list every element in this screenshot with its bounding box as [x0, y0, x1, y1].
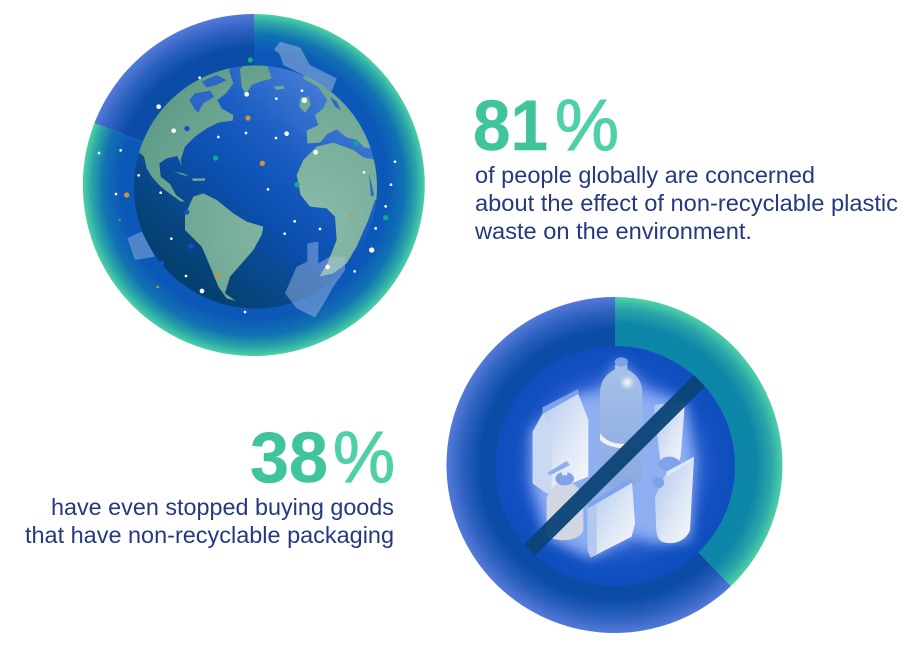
plastic bottle debris	[274, 42, 337, 92]
icon: pump bottle	[547, 461, 583, 540]
icon: pouch	[588, 477, 635, 558]
gauge remainder: blue wedge	[94, 14, 254, 185]
icon: spout pouch	[653, 457, 694, 543]
gauge value: green 81% wedge	[83, 14, 425, 356]
gauge value: green 38% wedge	[615, 297, 782, 586]
inner disc	[495, 346, 735, 586]
icon: prohibition slash	[524, 375, 705, 556]
text block: 81% description: about the effect of non-recyclable plastic	[475, 190, 898, 216]
icon: tube	[654, 402, 685, 471]
heading: 38%: 38	[250, 419, 328, 498]
blue particles	[160, 126, 194, 266]
globe ocean	[134, 66, 377, 308]
icon: carton	[533, 389, 588, 493]
icon: large water bottle	[599, 357, 642, 489]
panel: packaging gauge 38%	[446, 297, 782, 633]
white particles	[98, 76, 396, 313]
heading: 81%: 81	[473, 87, 548, 166]
text block: 81% description	[474, 162, 898, 244]
heading: 81%: %	[555, 86, 619, 166]
gauge remainder: blue wedge	[446, 297, 731, 633]
text block: 81% description: of people globally are concerned	[475, 162, 815, 188]
panel: globe gauge 81%	[83, 14, 425, 356]
plastic bag debris	[285, 242, 345, 317]
lakes and inland seas	[189, 75, 374, 197]
green particles	[118, 57, 388, 221]
heading: 38%: %	[333, 418, 395, 498]
plastic wrapper debris	[127, 232, 155, 260]
text block: 38% description	[25, 494, 394, 548]
icon: plastic packaging group	[524, 357, 705, 558]
text block: 81% description: waste on the environment.	[474, 218, 752, 244]
orange particles	[124, 115, 353, 288]
globe continents	[139, 66, 377, 301]
text block: 38% description: have even stopped buying goods	[51, 494, 394, 520]
packaging glow	[532, 358, 695, 558]
text block: 38% description: that have non-recyclable packaging	[25, 522, 394, 548]
